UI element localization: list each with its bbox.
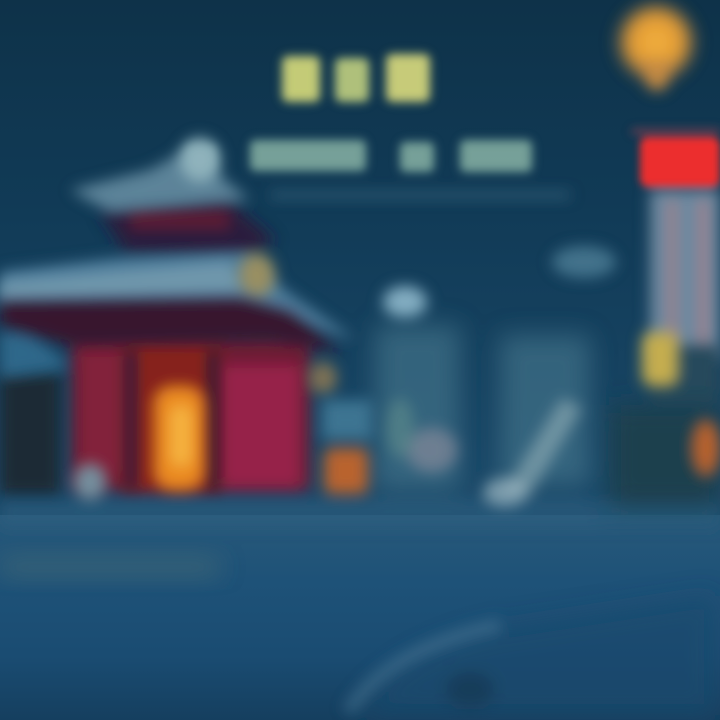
lower roof bbox=[0, 252, 355, 340]
glowing door bbox=[154, 386, 204, 490]
right building bbox=[610, 190, 720, 505]
faint text line bbox=[270, 188, 570, 202]
red walls bbox=[72, 338, 310, 490]
subtitle bbox=[185, 140, 532, 172]
road details bbox=[0, 498, 720, 715]
upper dark eave bbox=[100, 198, 275, 258]
left small roof bbox=[0, 330, 72, 378]
distant city towers bbox=[375, 246, 616, 506]
icon: glowing lamp bbox=[612, 0, 700, 90]
red neon sign bbox=[632, 128, 720, 187]
left dark structure bbox=[0, 372, 60, 494]
pagoda building bbox=[0, 138, 355, 494]
lantern on roof bbox=[239, 253, 275, 297]
title bbox=[282, 54, 430, 102]
lower maroon eave bbox=[0, 298, 340, 352]
upper roof bbox=[70, 145, 250, 212]
road base bbox=[0, 515, 720, 720]
side lanterns and pavilion bbox=[74, 362, 372, 500]
